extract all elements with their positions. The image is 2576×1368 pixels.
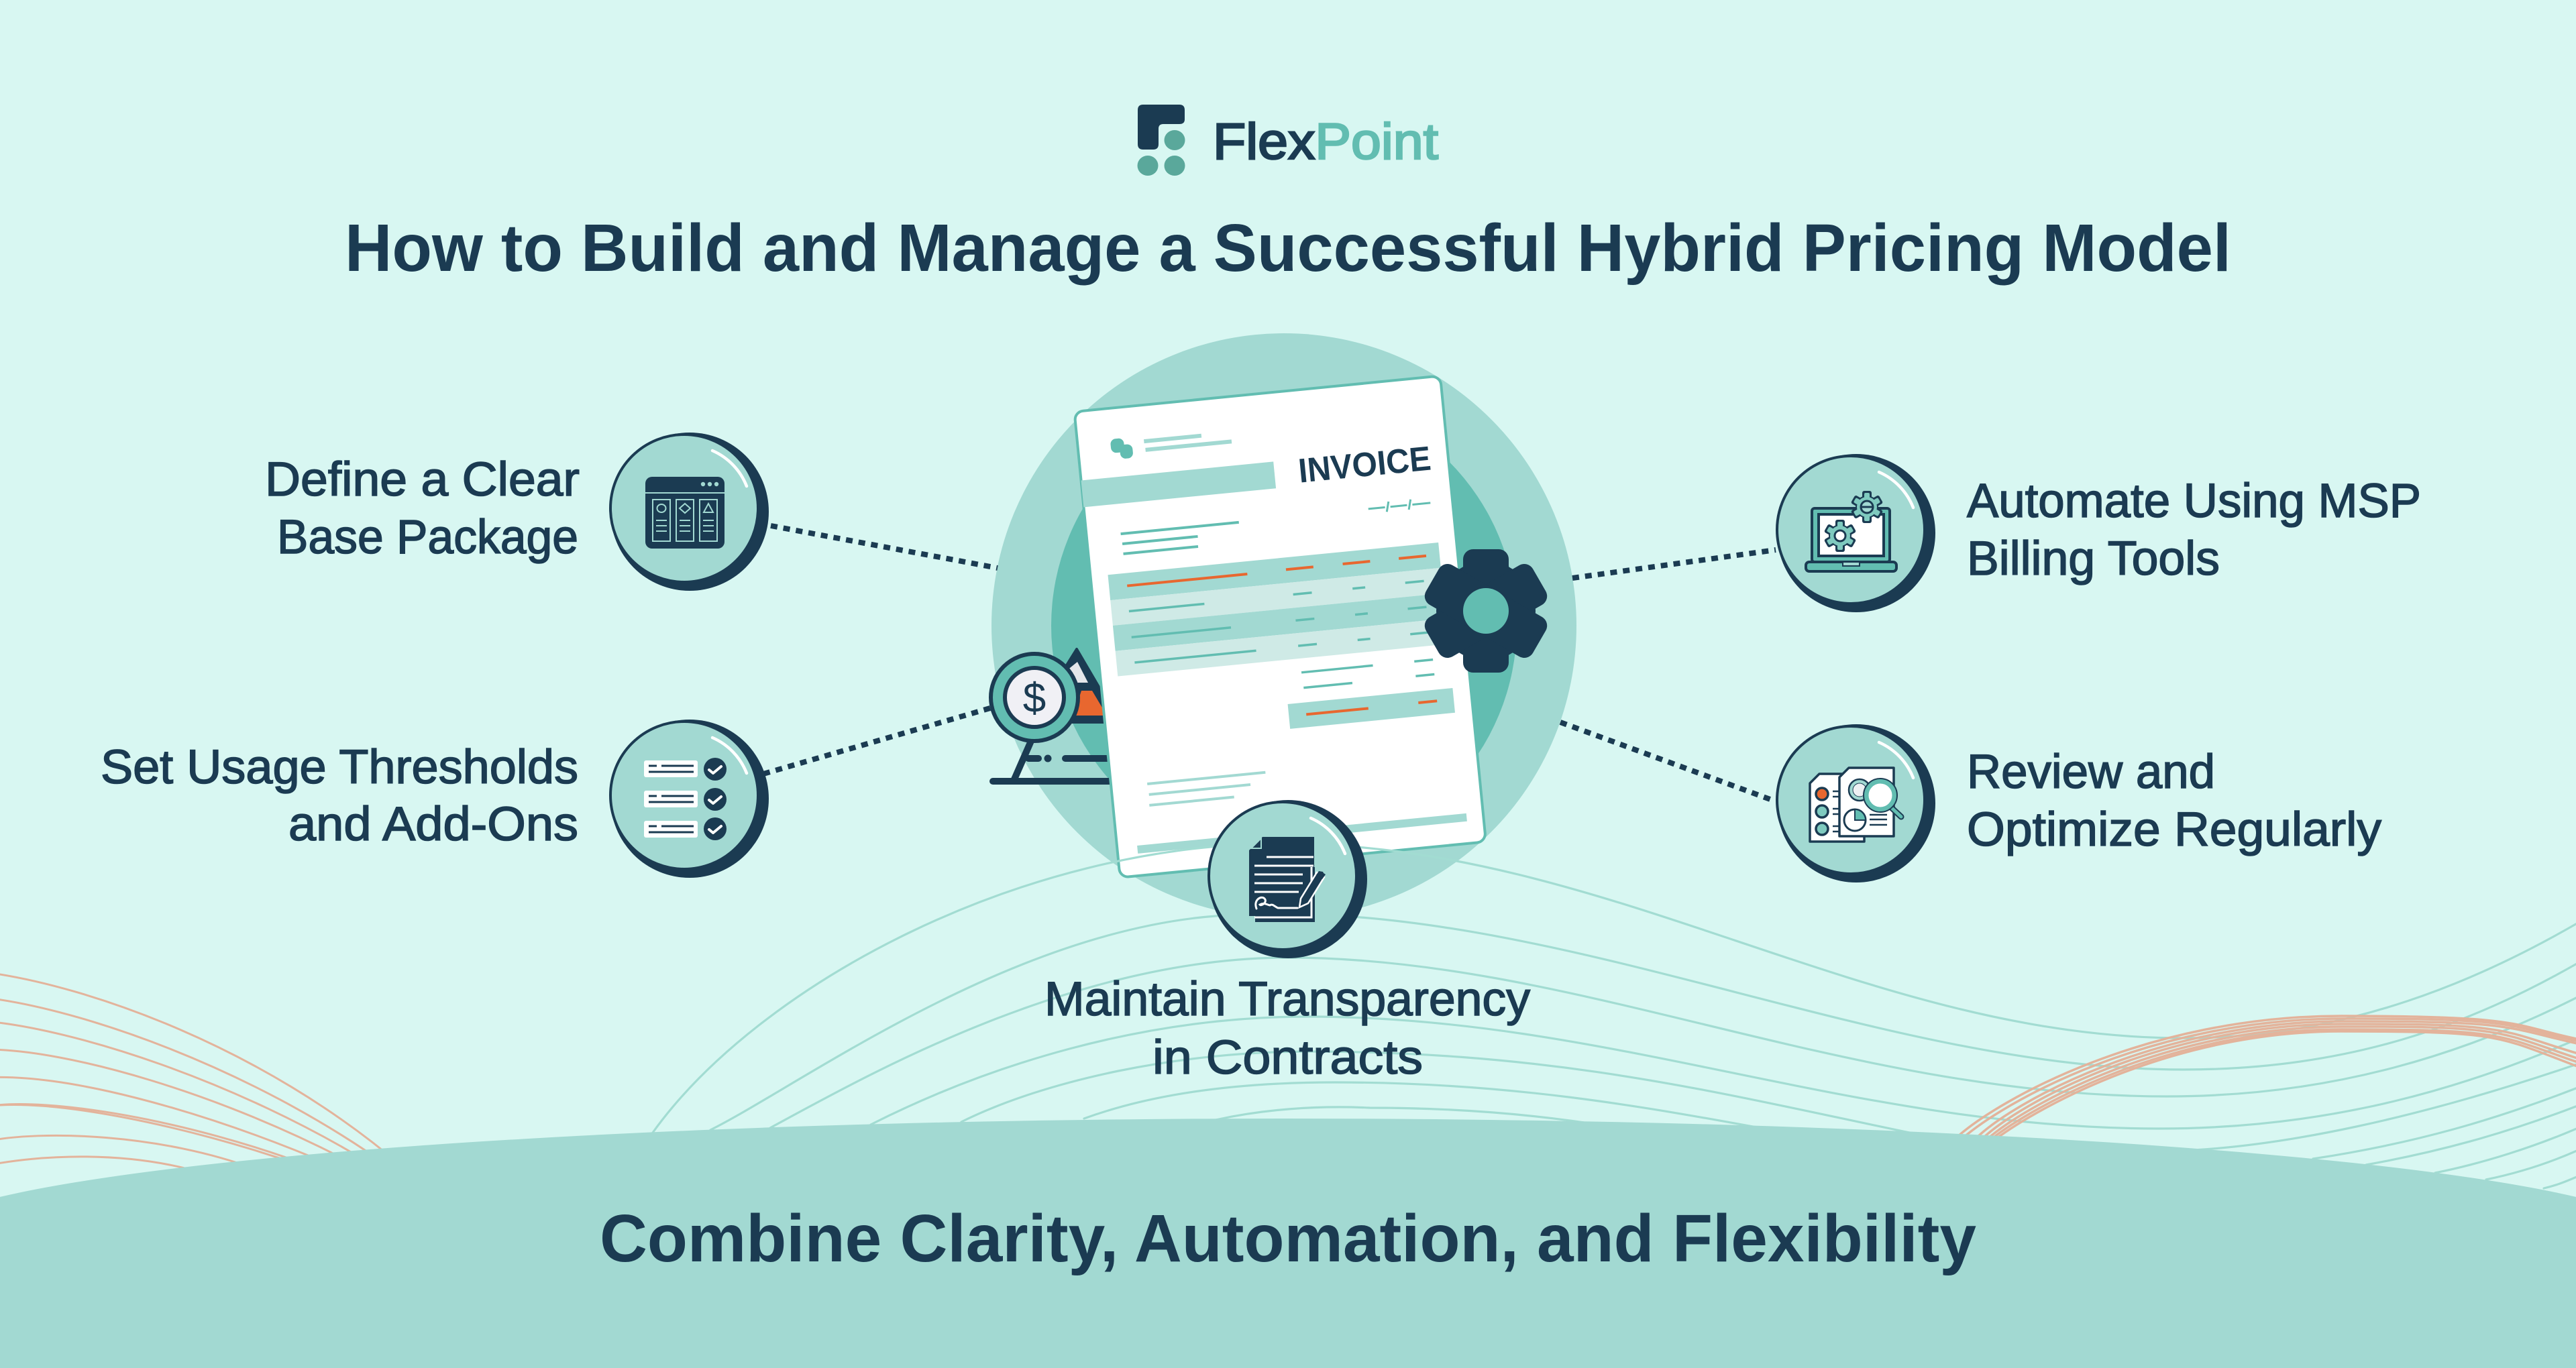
icon: pricing window — [645, 477, 724, 549]
label — [101, 741, 578, 851]
label: Review and — [1967, 746, 2215, 799]
invoice address lines — [1121, 522, 1241, 554]
logo: FlexPoint — [1138, 105, 1438, 176]
icon: laptop with gears — [1806, 491, 1896, 571]
invoice header lines — [1144, 433, 1232, 450]
dome footer background — [0, 1119, 2576, 1368]
label: Base Package — [277, 511, 578, 564]
label: Define a Clear — [265, 453, 580, 506]
bubble — [1777, 454, 1935, 612]
icon: signed contract — [1249, 837, 1326, 922]
icon: dollar coin magnifier — [991, 654, 1078, 741]
label: Set Usage Thresholds — [101, 741, 578, 794]
label: Billing Tools — [1967, 532, 2220, 585]
decorative waves — [0, 844, 2576, 1188]
label: in Contracts — [1152, 1031, 1423, 1084]
bubble — [1777, 724, 1935, 882]
icon: checklist — [644, 758, 727, 840]
bubble — [610, 720, 769, 878]
dollar sign: $ — [1023, 675, 1046, 722]
label: Automate Using MSP — [1967, 475, 2421, 528]
invoice footer lines — [1147, 773, 1267, 805]
bubble — [610, 433, 769, 591]
icon: gear on invoice — [1421, 549, 1551, 673]
label — [1967, 475, 2421, 585]
label — [1967, 746, 2382, 856]
label — [1044, 973, 1530, 1084]
invoice footer bar — [1137, 813, 1467, 854]
panel: step review and optimize regularly — [1777, 724, 2382, 882]
label — [265, 453, 580, 564]
icon: mountain and ground lines behind invoice — [993, 649, 1127, 781]
central circle backdrop — [991, 333, 1576, 918]
panel: step automate using MSP billing tools — [1777, 454, 2421, 612]
label: Optimize Regularly — [1967, 803, 2382, 856]
dotted connector: automate — [1572, 550, 1776, 578]
title: How to Build and Manage a Successful Hybrid Pricing Model — [345, 211, 2231, 286]
label: Maintain Transparency — [1044, 973, 1530, 1026]
dotted connector: review — [1560, 722, 1776, 801]
invoice totals — [1285, 658, 1455, 729]
panel: invoice document — [1075, 376, 1486, 878]
icon: reports and magnifier — [1810, 768, 1901, 842]
invoice logo — [1110, 437, 1134, 460]
logo mark — [1138, 105, 1185, 176]
label: and Add-Ons — [288, 798, 578, 851]
dotted connector: usage thresholds — [763, 708, 990, 774]
logo wordmark: FlexPoint — [1213, 113, 1438, 170]
invoice table — [1108, 543, 1448, 677]
panel: step maintain transparency in contracts — [1044, 800, 1530, 1084]
panel: step set usage thresholds and add-ons — [101, 720, 769, 878]
bubble — [1209, 800, 1367, 958]
invoice heading: INVOICE — [1297, 439, 1433, 490]
dotted connector: base package — [771, 526, 998, 568]
footer heading: Combine Clarity, Automation, and Flexibility — [600, 1201, 1976, 1276]
invoice date — [1368, 498, 1431, 514]
invoice header band — [1081, 461, 1276, 507]
panel: step define a clear base package — [265, 433, 769, 591]
